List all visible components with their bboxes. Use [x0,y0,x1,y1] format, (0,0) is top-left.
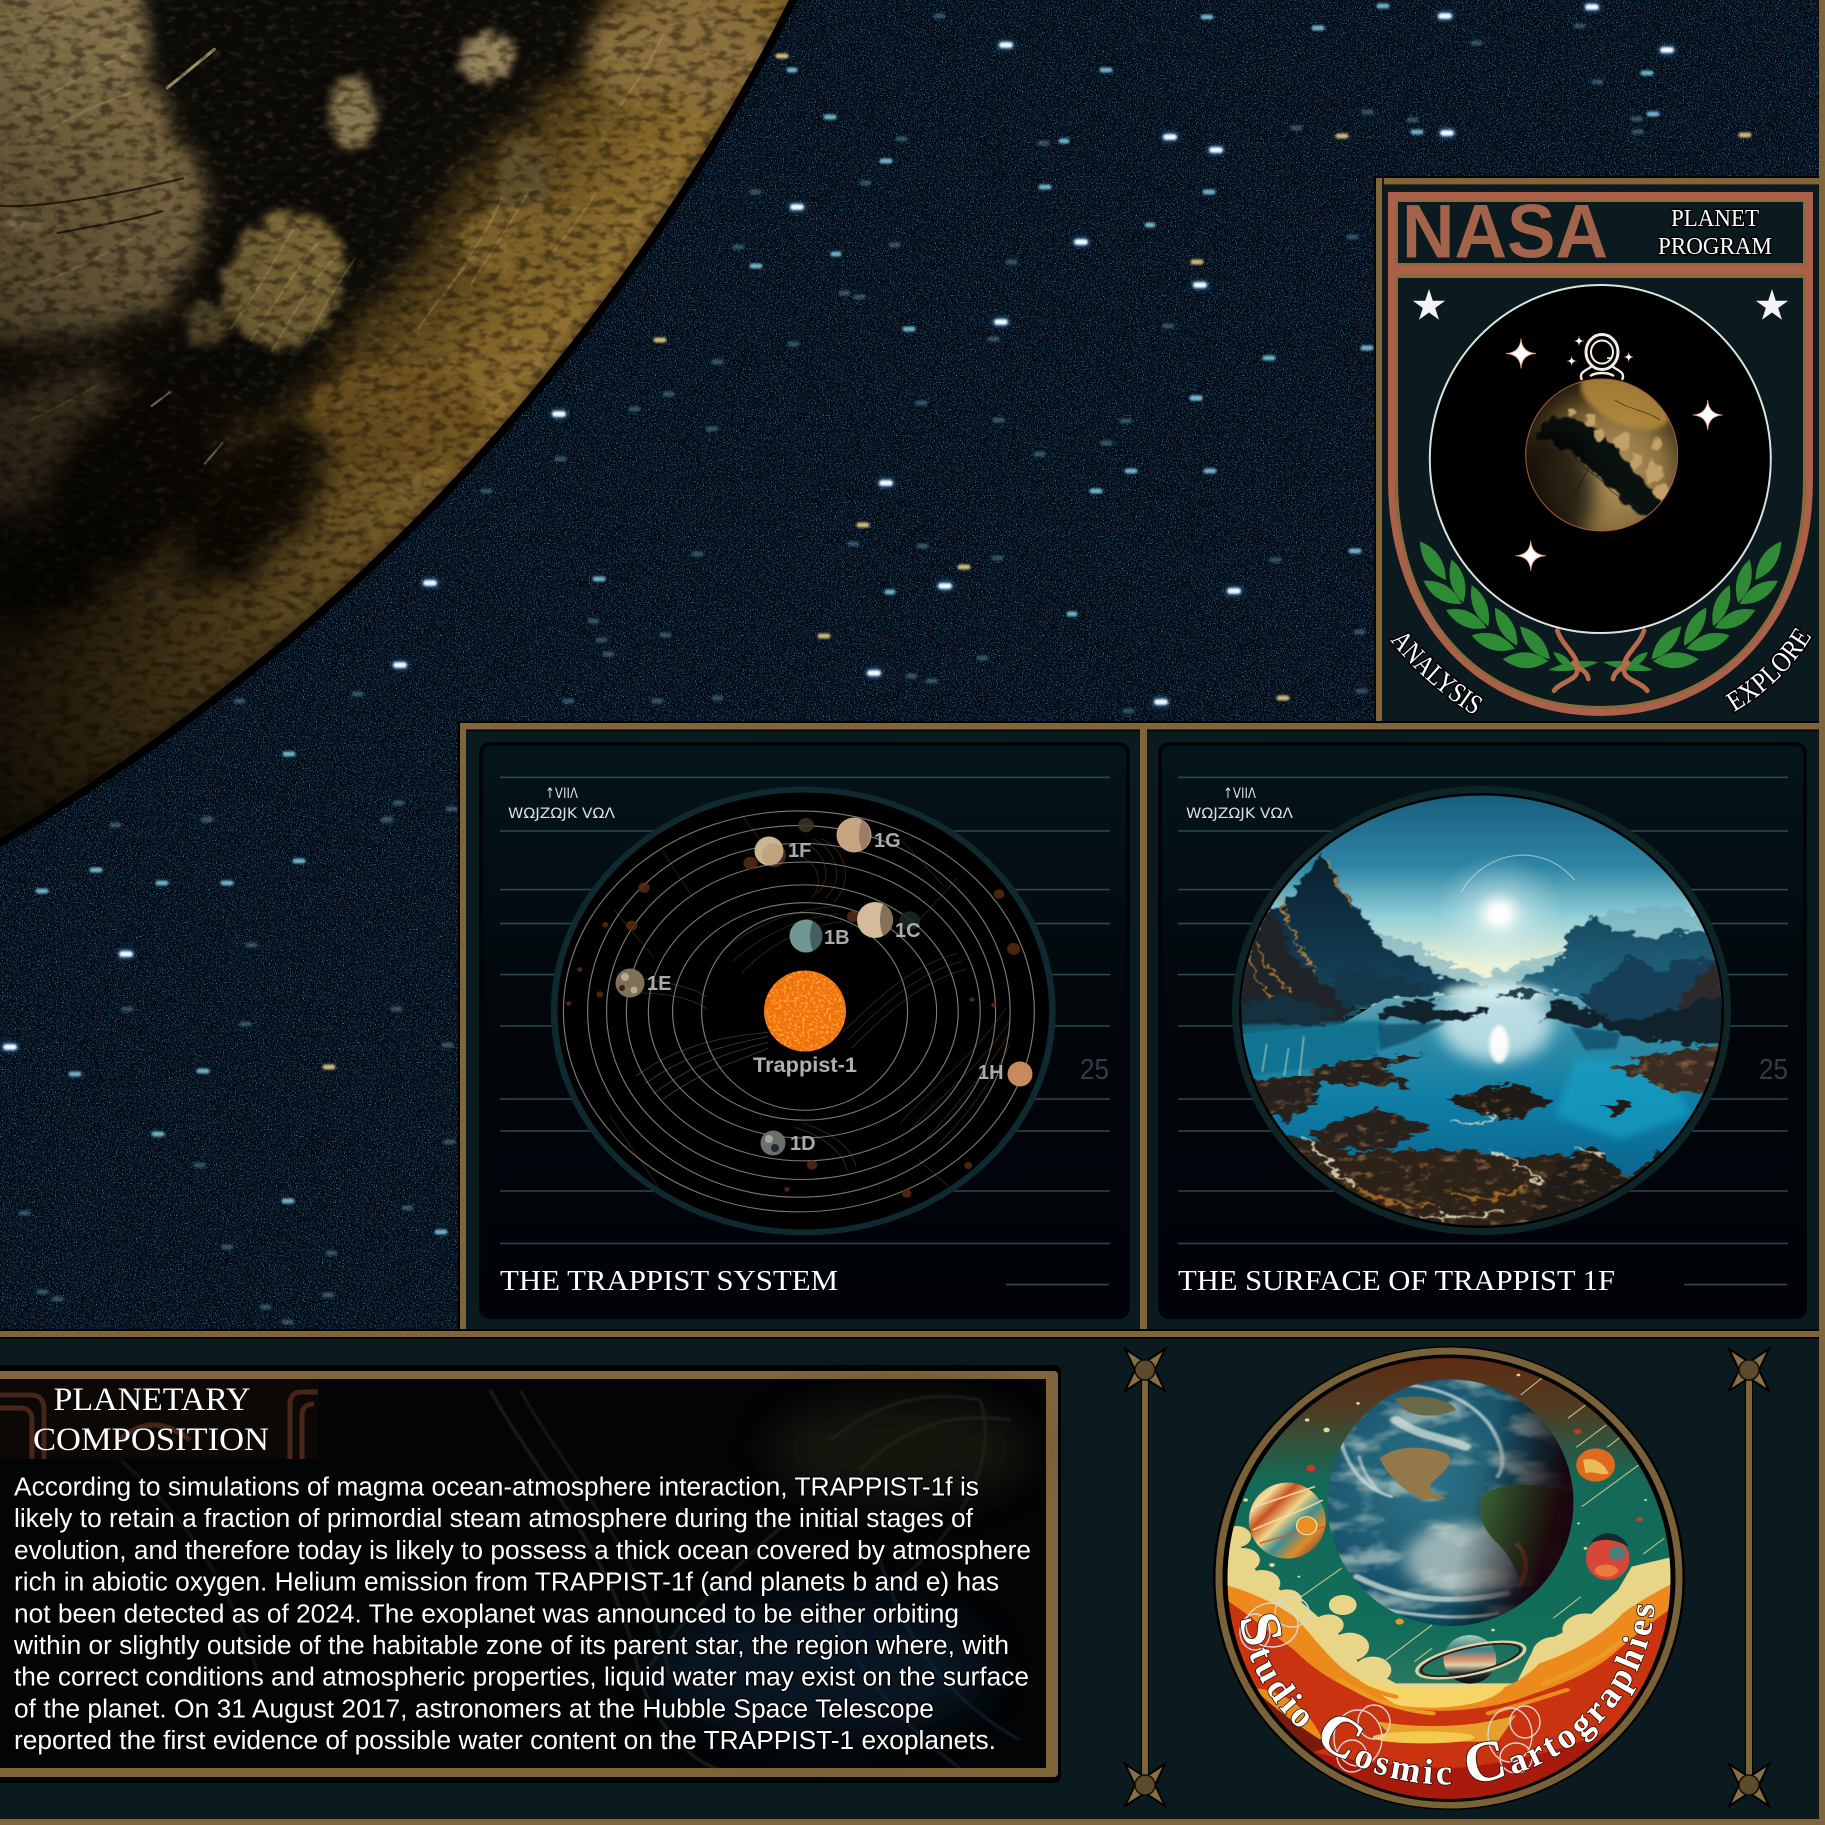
Saturn [1411,1634,1530,1686]
clouds: red [1216,1593,1673,1803]
streaks [1299,1378,1664,1662]
horizon glow [1359,1680,1507,1708]
page number: 25 [1759,1054,1788,1086]
middle band frame [0,720,1825,1825]
planet 1H: 1H [978,1062,1004,1084]
planet 1B: 1B [824,927,850,949]
small planet [1526,380,1678,530]
planet 1F: 1F [788,840,811,862]
Jupiter [1249,1483,1326,1559]
panel title: THE TRAPPIST SYSTEM [500,1266,838,1297]
warm stars [325,56,1749,1067]
planet 1C [857,902,921,942]
ribbons [1554,631,1647,691]
clouds: orange [1216,1583,1673,1803]
planet program heading: PLANET [1671,205,1759,232]
planet 1H [978,1062,1032,1086]
planet 1B [790,920,850,952]
flourishes around initials [1240,1597,1540,1773]
panel: mission badge [1382,185,1819,721]
gold frame lines [1374,0,1825,1825]
Earth [1322,1377,1581,1630]
star Trappist-1 [764,970,846,1052]
cloud strands [1317,1640,1622,1713]
ruled lines [1178,777,1788,1285]
dark cracks [0,178,183,233]
foreground glints [1306,1115,1603,1217]
studio name text: Studio Cosmic Cartographies [1240,1604,1656,1786]
ring arc [1461,855,1575,892]
studio logo medallion [1213,1346,1685,1810]
bright stars [6,7,1671,1047]
body text: not been detected as of 2024. The exoplanet was announced to be either orbiting [14,1600,959,1628]
body text: likely to retain a fraction of primordial steam atmosphere during the initial stages of [14,1505,974,1533]
planet 1E: 1E [647,973,671,995]
red planet right [1586,1533,1629,1580]
map label runes [1186,786,1293,822]
heading: COMPOSITION [33,1422,269,1458]
planet 1D: 1D [790,1133,816,1155]
laurel wreath [1420,541,1781,691]
planet 1G: 1G [874,830,901,852]
shield outline [1388,192,1813,716]
page number: 25 [1080,1054,1109,1086]
left cliff highlights [1249,858,1354,997]
planet 1C: 1C [895,920,921,942]
orbit filaments [610,815,1010,1187]
NASA logotype: NASA [1402,190,1608,274]
dark blotches [0,0,607,422]
panel: the Trappist system [481,744,1128,1317]
left branch [1420,541,1598,671]
light streaks [152,49,222,463]
planet program heading: PROGRAM [1658,233,1772,260]
mid rocks [1240,987,1725,1044]
landscape illustration [1242,796,1722,1226]
icon: astronaut [1581,334,1623,380]
body text: evolution, and therefore today is likely to possess a thick ocean covered by atmosphere [14,1537,1031,1565]
body text: of the planet. On 31 August 2017, astronomers at the Hubble Space Telescope [14,1695,934,1723]
motto: explore: EXPLORE [1723,626,1814,714]
map label runes [508,786,615,822]
body text: the correct conditions and atmospheric properties, liquid water may exist on the surface [14,1664,1029,1692]
icon: sparkles [1506,336,1723,571]
planet 1G [836,818,901,852]
body text: within or slightly outside of the habitable zone of its parent star, the region where, with [13,1632,1009,1660]
far hazy ridges [1376,906,1725,1005]
ornamental pillar right [1729,1349,1769,1806]
body text: rich in abiotic oxygen. Helium emission from TRAPPIST-1f (and planets b and e) has [14,1569,999,1597]
heading: PLANETARY [54,1382,250,1418]
tan regions [0,0,779,543]
ornamental pillar left [1125,1349,1165,1806]
heading backdrop [0,1380,318,1459]
icon: stars [1413,289,1788,320]
planet 1D [760,1130,816,1156]
water [1219,993,1734,1234]
left mountains [1219,852,1494,1040]
scattered bodies [566,818,1020,1198]
map label runes: ↑VIIΛ [1223,786,1256,802]
cloud bursts [2,22,523,603]
planet 1E [616,968,671,998]
star label: Trappist-1 [753,1054,857,1077]
body text: According to simulations of magma ocean-atmosphere interaction, TRAPPIST-1f is [14,1474,979,1502]
ruled lines [500,777,1110,1285]
panel title: THE SURFACE OF TRAPPIST 1F [1178,1266,1615,1297]
body text [13,1474,1031,1755]
lit patches [186,137,596,472]
orbit rings [563,811,1034,1212]
cloud swirls [1340,1385,1507,1617]
heading [33,1382,269,1458]
shadowed hemisphere [2,386,344,627]
continents [1380,1448,1450,1500]
panel: planetary composition [0,1365,1061,1783]
viewport ring [1236,790,1728,1232]
right branch [1603,541,1781,671]
right mountains [1516,916,1725,1040]
lower cloud mass [1405,1523,1525,1597]
dots [1243,1374,1647,1631]
small planet rim [1526,379,1678,531]
fine strands [10,33,664,428]
orbit chart [554,790,1052,1232]
clouds: cream [1216,1526,1673,1803]
reflections [1378,1022,1621,1050]
planet program heading [1658,205,1772,260]
map label runes: WΩJZΩJK VΩΛ [508,806,615,822]
bottom section background [0,1339,1825,1825]
medium stars [38,6,1657,1232]
emblem disc [1430,285,1771,633]
giant planet TRAPPIST-1f [0,0,798,847]
sun glow [1434,854,1565,973]
map label runes: ↑VIIΛ [545,786,578,802]
planet top right [1576,1448,1615,1482]
planet 1F [754,836,811,867]
shoreline rocks [1249,1044,1725,1234]
background waves [120,1390,1020,1770]
body text: reported the first evidence of possible water content on the TRAPPIST-1 exoplanets. [14,1727,996,1755]
motto: analysis: ANALYSIS [1388,632,1484,715]
faint stars [21,16,1641,1322]
panel: surface of Trappist 1F [1160,744,1805,1317]
map label runes: WΩJZΩJK VΩΛ [1186,806,1293,822]
